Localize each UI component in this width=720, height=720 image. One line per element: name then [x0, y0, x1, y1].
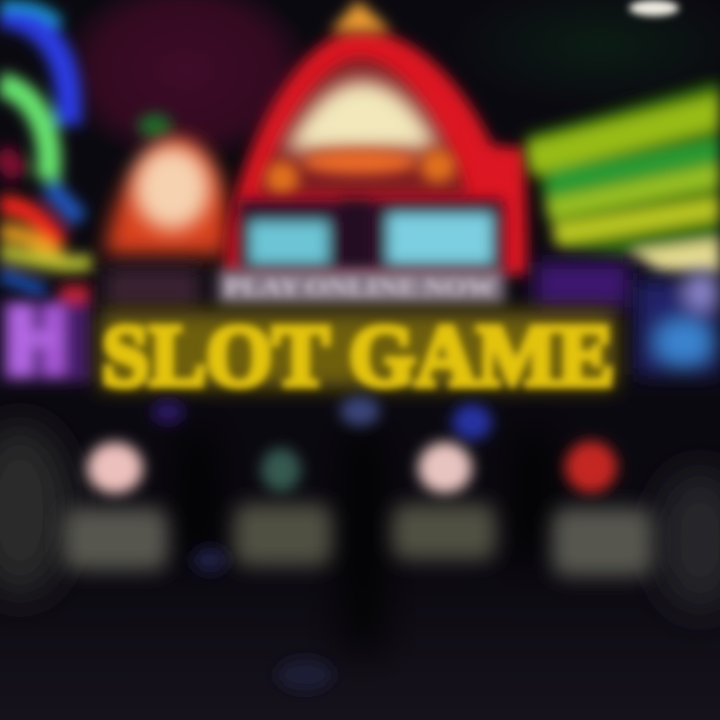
side panels: [105, 262, 630, 308]
reels screens: [238, 198, 503, 275]
arch marquee: [226, 0, 528, 275]
rainbow arcs left: [0, 6, 92, 292]
title band: [100, 312, 616, 388]
moon light top right: [629, 0, 679, 16]
purple letters left: [0, 285, 90, 382]
fruit icon left: [105, 114, 228, 255]
feature card 2: [234, 448, 332, 566]
subtitle strip: [218, 270, 504, 304]
title: SLOT GAME: SLOT GAME: [102, 308, 614, 405]
feature card 3: [392, 442, 496, 560]
small blue accents: [152, 396, 492, 691]
green stripes right: [525, 80, 720, 272]
feature card 4: [552, 441, 652, 576]
right cluster blue and purple: [636, 270, 720, 375]
feature card 1: [64, 442, 168, 570]
subtitle strip: PLAY ONLINE NOW: [225, 275, 495, 301]
